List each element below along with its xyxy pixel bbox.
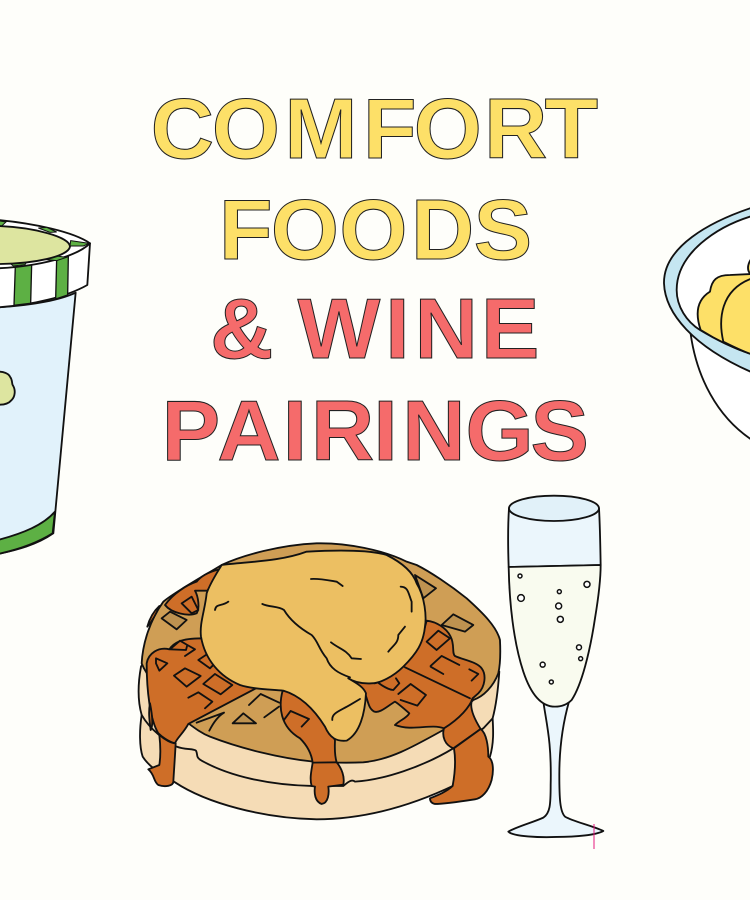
syrup upper left [147,569,219,627]
syrup left [147,638,256,743]
flute rim [509,496,599,521]
syrup centre drip [281,691,344,804]
tub label blob [0,372,15,405]
tub green base band [0,512,55,554]
flute stem and foot [508,702,603,837]
flute empty upper bowl [508,508,601,567]
flute wine [509,565,601,707]
waffle dark cells [162,575,473,723]
food: small bump [748,258,750,275]
title line: & WINE: & WINE [210,282,539,377]
bowl rim [664,208,750,372]
crop mark [593,824,595,849]
title line: COMFORT: COMFORT [151,82,598,177]
syrup cell lines [156,597,232,708]
food: back piece [698,274,750,354]
bottom waffle cream body [139,630,499,819]
syrup left drip [148,703,176,786]
food: front piece [721,278,750,354]
icon: ice cream tub [0,220,90,554]
lid top rim [0,220,90,268]
title line: FOODS: FOODS [219,183,532,278]
bowl interior [677,216,750,354]
bubbles [518,574,590,684]
icon: chicken and waffles [139,543,500,819]
icon: bowl of potatoes [664,208,750,440]
syrup right cell lines [284,631,478,763]
lid rim green marks [0,221,89,266]
layer divider [142,715,493,786]
waffle cell lines [197,694,279,731]
lid side [0,243,90,307]
title line: PAIRINGS: PAIRINGS [162,384,589,479]
chicken crust lines [215,579,412,720]
top waffle [142,543,500,763]
lid inner ice cream [0,226,70,264]
bowl body [691,334,750,440]
title [151,82,598,479]
lid stripes [14,257,68,305]
syrup right drip [430,729,493,804]
syrup right [349,621,485,748]
chicken [201,551,426,741]
tub body [0,293,76,554]
icon: champagne flute [508,496,603,837]
